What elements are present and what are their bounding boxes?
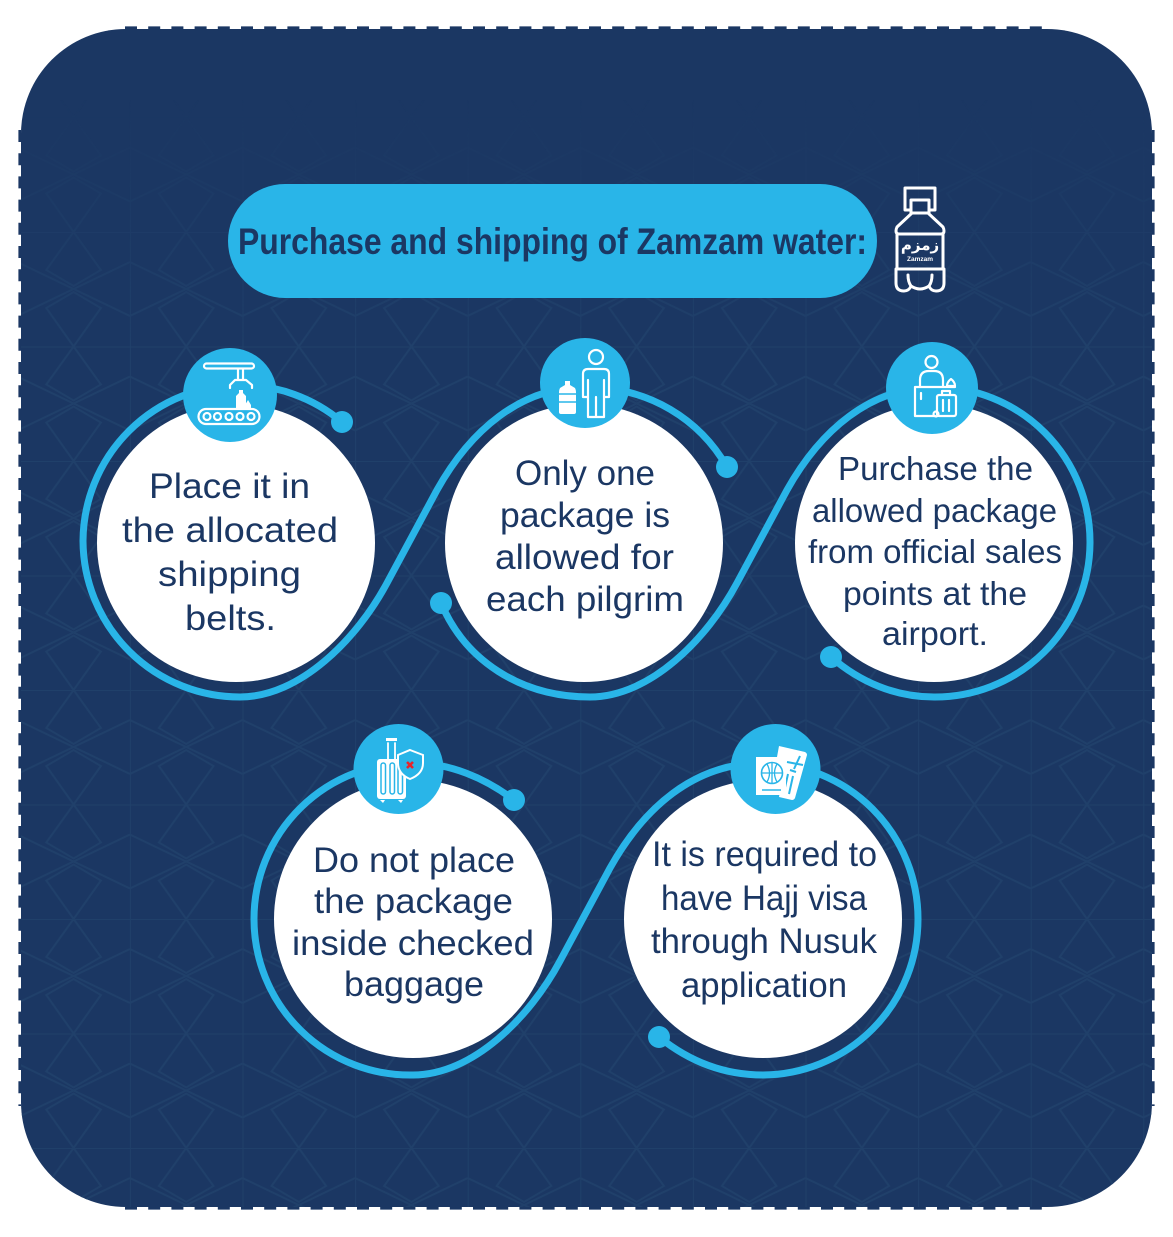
text: step 5: have Hajj visa xyxy=(661,879,867,918)
text: step 3: points at the xyxy=(843,575,1027,612)
icon: conveyor belt xyxy=(183,348,277,442)
connector ring: steps 4 and 5 xyxy=(254,763,918,1075)
icon: Zamzam bottle xyxy=(896,188,944,291)
step 3: purchase xyxy=(795,342,1073,682)
text: step 3: allowed package xyxy=(812,492,1057,529)
text: step 1: belts. xyxy=(185,599,276,638)
icon: Zamzam bottle: زمزم xyxy=(901,237,939,254)
text: step 2: each pilgrim xyxy=(486,580,684,619)
text: step 1 xyxy=(122,467,338,638)
connector ring: steps 1 and 2 xyxy=(83,385,727,697)
text: step 5 xyxy=(651,835,877,1005)
icon: sales point xyxy=(886,342,978,434)
step 4: checked baggage xyxy=(274,724,552,1058)
text: step 1: Place it in xyxy=(149,467,310,506)
step 5: Hajj visa xyxy=(624,724,902,1058)
text: step 4 xyxy=(292,841,534,1004)
dot: step 1 path end xyxy=(331,411,353,433)
dot: step 3 path end xyxy=(820,646,842,668)
icon: Zamzam bottle: Zamzam xyxy=(907,256,933,263)
step 2: one package xyxy=(430,338,738,682)
text: step 5: through Nusuk xyxy=(651,922,877,961)
text: step 2: Only one xyxy=(515,454,655,493)
text: step 2: package is xyxy=(500,496,670,535)
icon: pilgrim with package xyxy=(540,338,630,428)
text: step 5: It is required to xyxy=(652,835,877,874)
text: step 3 xyxy=(808,450,1062,652)
text: step 3: Purchase the xyxy=(838,450,1033,487)
connector ring: steps 2 and 3 xyxy=(441,387,1090,697)
text: step 4: inside checked xyxy=(292,924,534,963)
step 1: shipping belts xyxy=(97,348,375,682)
text: step 4: Do not place xyxy=(313,841,515,880)
title pill xyxy=(228,184,877,298)
title: Purchase and shipping of Zamzam water: xyxy=(238,221,867,262)
text: step 5: application xyxy=(681,966,847,1005)
text: step 1: shipping xyxy=(158,555,301,594)
text: step 4: the package xyxy=(314,882,513,921)
dot: step 5 path end xyxy=(648,1026,670,1048)
text: step 3: airport. xyxy=(882,615,988,652)
icon: passport and ticket xyxy=(730,724,820,814)
text: step 2 xyxy=(486,454,684,619)
icon: suitcase with shield xyxy=(354,724,444,814)
text: step 1: the allocated xyxy=(122,511,338,550)
dot: step 2 path start xyxy=(430,592,452,614)
text: step 2: allowed for xyxy=(495,538,674,577)
dot: step 4 path end xyxy=(503,789,525,811)
dot: step 2 path end xyxy=(716,456,738,478)
text: step 4: baggage xyxy=(344,965,484,1004)
text: step 3: from official sales xyxy=(808,533,1062,570)
